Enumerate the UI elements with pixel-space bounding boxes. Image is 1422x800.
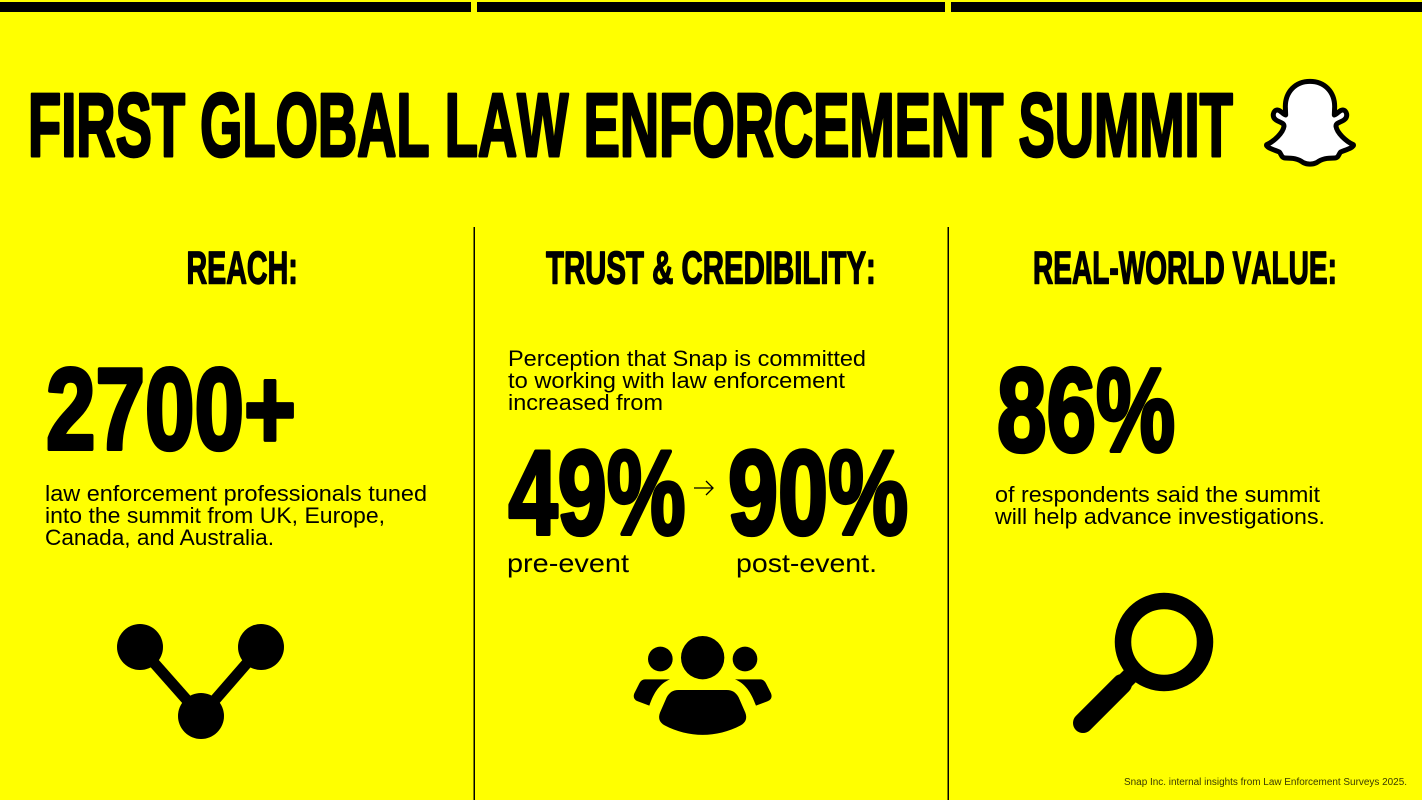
text block: perception	[508, 346, 866, 415]
icon: Snapchat ghost logo	[1267, 81, 1353, 164]
text block: reach description: into the summit from UK, Europe,	[45, 503, 385, 528]
text block: respondents: of respondents said the summit	[995, 482, 1320, 507]
text block: reach description: Canada, and Australia.	[45, 525, 274, 550]
text block: reach description: law enforcement professionals tuned	[45, 481, 427, 506]
statistic: 86%: 86%	[997, 344, 1175, 477]
title: FIRST GLOBAL LAW ENFORCEMENT SUMMIT	[28, 76, 1233, 176]
panel: reach	[45, 242, 427, 739]
text block: respondents: will help advance investigations.	[994, 504, 1325, 529]
statistic: 90% post-event: post-event.	[736, 548, 877, 578]
statistic: 90% post-event: 90%	[728, 426, 908, 560]
icon: group of people	[634, 636, 772, 735]
text block: perception: to working with law enforcement	[508, 368, 845, 393]
heading: real-world value: REAL-WORLD VALUE:	[1033, 242, 1337, 294]
text block: perception: increased from	[508, 390, 663, 415]
statistic: 49% pre-event: 49%	[508, 426, 686, 560]
statistic: 49% pre-event: pre-event	[507, 548, 630, 578]
icon: magnifying glass	[1083, 601, 1205, 723]
statistic: 2700+: 2700+	[46, 344, 296, 474]
panel: trust and credibility	[507, 242, 908, 735]
icon: network nodes	[117, 624, 284, 739]
text block: perception: Perception that Snap is committed	[508, 346, 866, 371]
heading: reach: REACH:	[186, 242, 298, 294]
heading: trust and credibility: TRUST & CREDIBILITY:	[546, 242, 876, 294]
text block: respondents	[994, 482, 1325, 529]
panel: real-world value	[994, 242, 1337, 723]
footnote: Snap Inc. internal insights from Law Enforcement Surveys 2025.	[1124, 777, 1407, 788]
arrow	[694, 481, 713, 495]
text block: reach description	[45, 481, 427, 550]
